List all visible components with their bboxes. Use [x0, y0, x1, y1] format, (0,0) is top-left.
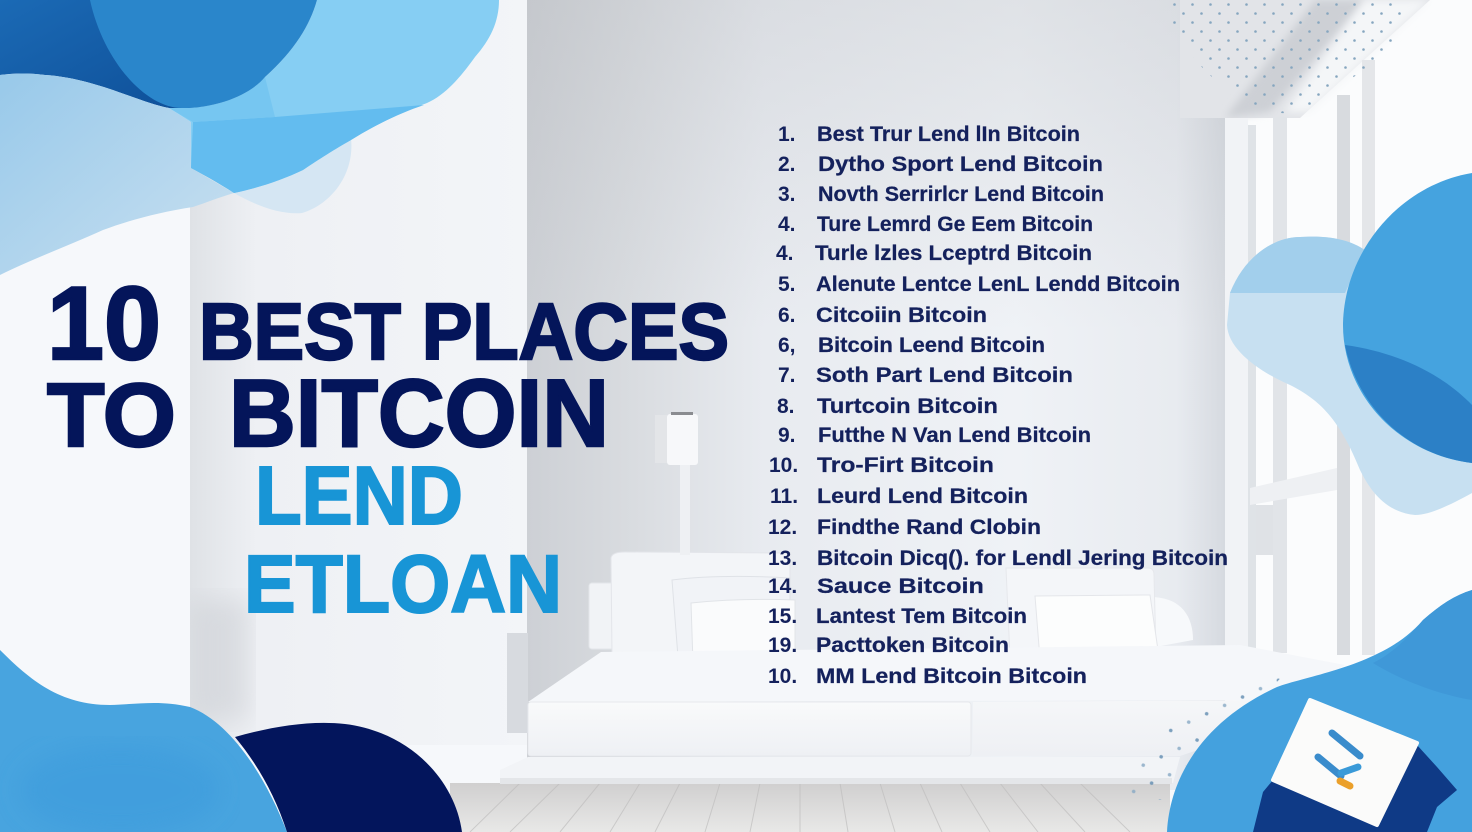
ranked list: 6.	[778, 304, 796, 327]
ranked list: 4.	[776, 242, 794, 265]
blob: top left overlap	[169, 77, 275, 122]
ranked list	[768, 122, 1228, 688]
ranked list: Citcoiin Bitcoin	[816, 303, 987, 327]
ranked list: Turtcoin Bitcoin	[817, 394, 998, 418]
ranked list: 10.	[768, 665, 797, 688]
ranked list: Pacttoken Bitcoin	[816, 633, 1009, 657]
ranked list: Best Trur Lend lIn Bitcoin	[817, 122, 1080, 146]
mattress right	[973, 668, 1345, 756]
dot pattern: top right	[1165, 0, 1405, 113]
blob: right circle shade	[1345, 345, 1472, 463]
check mark bars	[1318, 733, 1360, 786]
ranked list: Ture Lemrd Ge Eem Bitcoin	[817, 212, 1093, 236]
ranked list: Leurd Lend Bitcoin	[817, 484, 1028, 508]
card icon	[1253, 700, 1457, 832]
ranked list: Lantest Tem Bitcoin	[816, 604, 1027, 628]
ranked list: Alenute Lentce LenL Lendd Bitcoin	[816, 272, 1180, 296]
title: ETLOAN	[244, 539, 562, 630]
low headboard	[589, 583, 615, 649]
blob: top left circle	[90, 0, 317, 108]
white card	[1273, 700, 1417, 825]
blob: top left pale wave	[0, 74, 234, 275]
navy brush	[1253, 745, 1457, 832]
ranked list: 8.	[777, 395, 795, 418]
title: BITCOIN	[229, 360, 609, 467]
ranked list: Bitcoin Dicq(). for Lendl Jering Bitcoin	[817, 546, 1228, 570]
ranked list: 2.	[778, 153, 796, 176]
title: TO	[47, 366, 176, 466]
dot pattern: bottom right	[1130, 668, 1290, 800]
ranked list: 4.	[778, 213, 796, 236]
ranked list: Soth Part Lend Bitcoin	[816, 363, 1073, 387]
ranked list: Bitcoin Leend Bitcoin	[818, 333, 1045, 357]
ranked list: 15.	[768, 605, 797, 628]
ranked list: 6,	[778, 334, 796, 357]
ranked list: 19.	[768, 634, 797, 657]
blob: bottom left navy	[235, 723, 462, 832]
ranked list: Findthe Rand Clobin	[817, 515, 1041, 539]
ranked list: Tro-Firt Bitcoin	[817, 453, 994, 477]
pillows	[611, 552, 1159, 663]
ranked list: Futthe N Van Lend Bitcoin	[818, 423, 1091, 447]
bed	[500, 552, 1345, 784]
ranked list: 13.	[768, 547, 797, 570]
ranked list: Novth Serrirlcr Lend Bitcoin	[818, 182, 1104, 206]
ranked list: Sauce Bitcoin	[817, 574, 984, 598]
blob: right circle	[1343, 173, 1472, 463]
blob: bottom right	[1167, 590, 1472, 832]
ranked list: 9.	[778, 424, 796, 447]
blob: right pale	[1227, 237, 1472, 515]
lamp	[655, 412, 698, 555]
ranked list: Dytho Sport Lend Bitcoin	[818, 152, 1103, 176]
ranked list: 5.	[778, 273, 796, 296]
ranked list: 7.	[778, 364, 796, 387]
ranked list: 11.	[770, 485, 798, 508]
window	[1180, 0, 1472, 670]
title: 10	[47, 266, 161, 382]
title: LEND	[255, 449, 463, 542]
title	[47, 266, 729, 630]
blob: top left dark blue	[0, 0, 200, 108]
blob: top left pale lobe	[234, 138, 351, 213]
ranked list: Turle lzles Lceptrd Bitcoin	[815, 241, 1092, 265]
mattress left	[528, 702, 971, 756]
ranked list: 1.	[778, 123, 796, 146]
ranked list: 14.	[768, 575, 797, 598]
ranked list: 12.	[768, 516, 797, 539]
blob: top left light blue	[169, 0, 499, 193]
mattress top	[528, 645, 1345, 702]
floor	[450, 783, 1170, 832]
bolster	[1150, 597, 1193, 648]
title: BEST PLACES	[199, 287, 729, 376]
ranked list: MM Lend Bitcoin Bitcoin	[816, 664, 1087, 688]
ranked list: 3.	[778, 183, 796, 206]
platform	[500, 757, 1180, 783]
blob: bottom left blue	[0, 650, 287, 832]
ranked list: 10.	[769, 454, 798, 477]
blob: top left mid blue	[191, 105, 424, 193]
